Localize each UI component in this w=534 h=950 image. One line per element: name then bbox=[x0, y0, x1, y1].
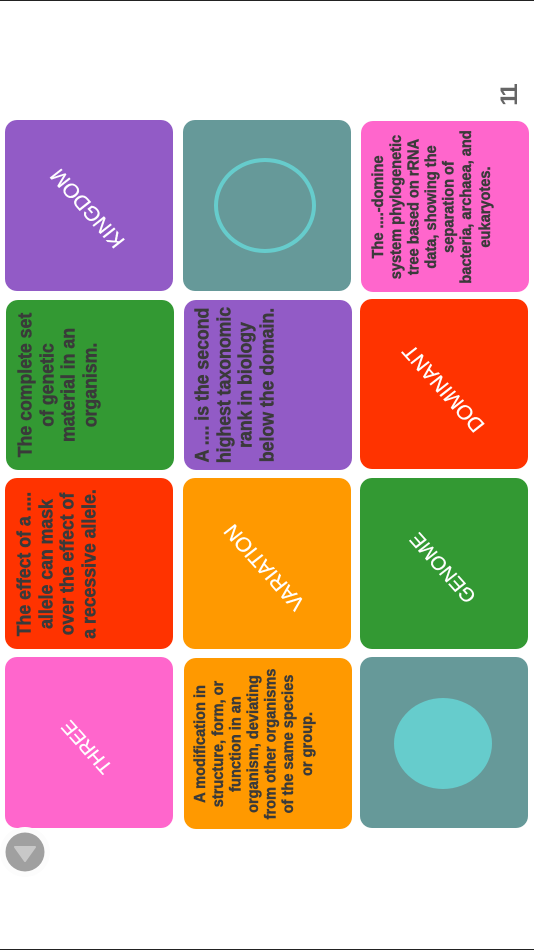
card: variation clue: from other organisms bbox=[263, 668, 280, 819]
card: three-domain clue: data, showing the bbox=[423, 145, 441, 268]
card: variation clue: function in an bbox=[227, 696, 245, 791]
card: THREE: THREE bbox=[56, 716, 117, 778]
button: down arrow bbox=[6, 827, 44, 872]
card: VARIATION bbox=[183, 478, 351, 649]
card: variation clue: organism, deviating bbox=[245, 675, 263, 812]
icon: filled circle bbox=[394, 698, 492, 789]
card: dominant clue: The effect of a .... bbox=[13, 491, 35, 636]
top edge line bbox=[0, 0, 534, 1]
card: three-domain clue bbox=[361, 121, 529, 292]
card: dominant clue: over the effect of bbox=[56, 492, 78, 635]
card: DOMINANT bbox=[360, 299, 528, 469]
card: genome clue: material in an bbox=[57, 328, 79, 442]
card: variation clue: or group. bbox=[298, 711, 316, 776]
card: DOMINANT: DOMINANT bbox=[398, 340, 490, 436]
card: genome clue: of genetic bbox=[35, 343, 57, 427]
card: kingdom clue: A .... is the second bbox=[191, 308, 213, 462]
card: GENOME: GENOME bbox=[406, 528, 481, 606]
card: THREE bbox=[5, 657, 173, 828]
card: variation clue: of the same species bbox=[281, 674, 298, 813]
card: genome clue: organism. bbox=[78, 343, 100, 427]
card: genome clue: The complete set bbox=[14, 313, 36, 457]
card: GENOME bbox=[360, 478, 528, 649]
card: three-domain clue: system phylogenetic bbox=[388, 134, 405, 279]
card: kingdom clue: rank in biology bbox=[234, 322, 256, 448]
card: variation clue: A modification in bbox=[192, 685, 210, 802]
card: kingdom clue bbox=[184, 300, 352, 470]
card: VARIATION: VARIATION bbox=[220, 519, 310, 614]
card: ring symbol bbox=[183, 120, 351, 291]
card: dominant clue: a recessive allele. bbox=[77, 489, 99, 638]
card: KINGDOM bbox=[5, 120, 173, 291]
bottom edge line bbox=[0, 949, 534, 950]
card: three-domain clue: tree based on rRNA bbox=[405, 138, 423, 275]
card: three-domain clue: separation of bbox=[441, 161, 458, 252]
card: dominant clue: allele can mask bbox=[34, 499, 56, 628]
card: genome clue bbox=[6, 300, 174, 470]
card: KINGDOM: KINGDOM bbox=[46, 164, 130, 251]
card: three-domain clue: The ....-domine bbox=[370, 155, 388, 258]
card: variation clue bbox=[184, 658, 352, 829]
button circle bbox=[6, 827, 44, 872]
icon: hollow circle bbox=[214, 158, 316, 253]
card: three-domain clue: bacteria, archaea, and bbox=[459, 130, 476, 283]
card: variation clue: structure, form, or bbox=[210, 680, 227, 807]
score number: 11 bbox=[496, 86, 523, 106]
card: filled circle symbol bbox=[360, 657, 528, 828]
card: kingdom clue: below the domain. bbox=[255, 308, 277, 462]
card: three-domain clue: eukaryotes. bbox=[476, 166, 494, 247]
card: dominant clue bbox=[5, 478, 173, 649]
card: kingdom clue: highest taxonomic bbox=[212, 307, 234, 463]
